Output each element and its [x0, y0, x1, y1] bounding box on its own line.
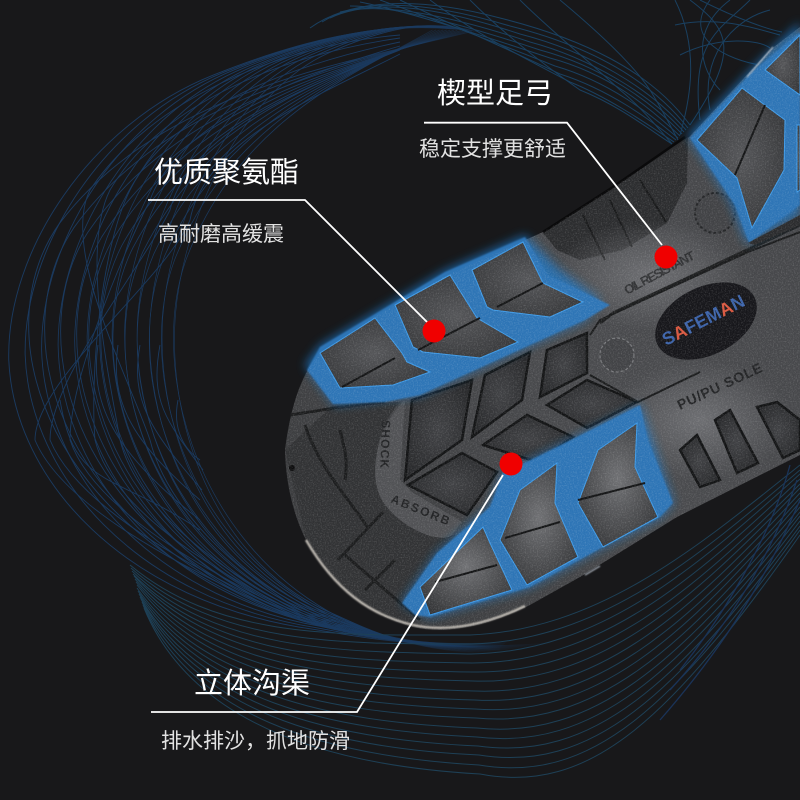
hexagonal lug edge: [590, 232, 800, 402]
callout: polyurethane: [154, 156, 299, 246]
mid gray highlights: [555, 220, 745, 330]
sole base shape: [285, 27, 800, 630]
callout: grooves: [161, 667, 350, 753]
heel shading: [285, 402, 455, 627]
right gray highlight: [610, 360, 790, 480]
absorb text: ABSORB: [389, 492, 452, 528]
blue upper right band: [690, 32, 800, 243]
logo oval: [643, 267, 769, 375]
round mould mark: [600, 338, 634, 372]
upper right lugs: [697, 35, 800, 228]
blue forefoot band: [307, 237, 610, 404]
heading: wedge arch: 楔型足弓: [437, 77, 553, 110]
edge highlights: [585, 47, 773, 575]
lower right lug: [748, 215, 800, 245]
blue glow: [305, 22, 800, 617]
sub text: polyurethane: 高耐磨高缓震: [158, 223, 284, 246]
sub text: grooves: 排水排沙，抓地防滑: [161, 730, 350, 753]
top wave band lines: [310, 0, 782, 144]
logo text: SAFEMAN: [659, 290, 750, 350]
diagonal dark lines: [660, 465, 800, 720]
sole texture speckle: [280, 20, 800, 640]
heel vent hole: [289, 465, 295, 471]
logo background: [643, 267, 769, 375]
logo band groove: [600, 225, 800, 323]
sole details: [285, 137, 800, 627]
heading: polyurethane: 优质聚氨酯: [154, 156, 299, 189]
blue lower band: [402, 405, 673, 617]
inner net end lines: [60, 345, 203, 530]
heel grooves: [290, 402, 420, 620]
crossing net lines: [35, 35, 400, 620]
arch ribs: [543, 137, 685, 260]
forefoot lugs: [320, 242, 583, 388]
callout leader lines: [148, 123, 662, 712]
silver rim: [306, 540, 525, 628]
heel u-shaped band: [375, 400, 462, 538]
callout: wedge arch: [419, 77, 566, 161]
lower flowing lines: [130, 465, 800, 777]
center lugs: [405, 333, 800, 515]
shoe sole: [285, 22, 800, 630]
red markers: [422, 246, 678, 476]
net ring lines: [0, 2, 545, 679]
lower lugs: [420, 423, 658, 615]
round vent mark: [695, 193, 735, 233]
sub text: wedge arch: 稳定支撑更舒适: [419, 138, 566, 161]
shock text: SHOCK: [377, 420, 393, 469]
arch recess: [543, 137, 688, 260]
sole model text: PU/PU SOLE: [675, 359, 765, 413]
heading: grooves: 立体沟渠: [194, 667, 310, 700]
lug grooves: [342, 105, 765, 582]
sole embossed text: OIL RESISTANT: [621, 248, 697, 298]
